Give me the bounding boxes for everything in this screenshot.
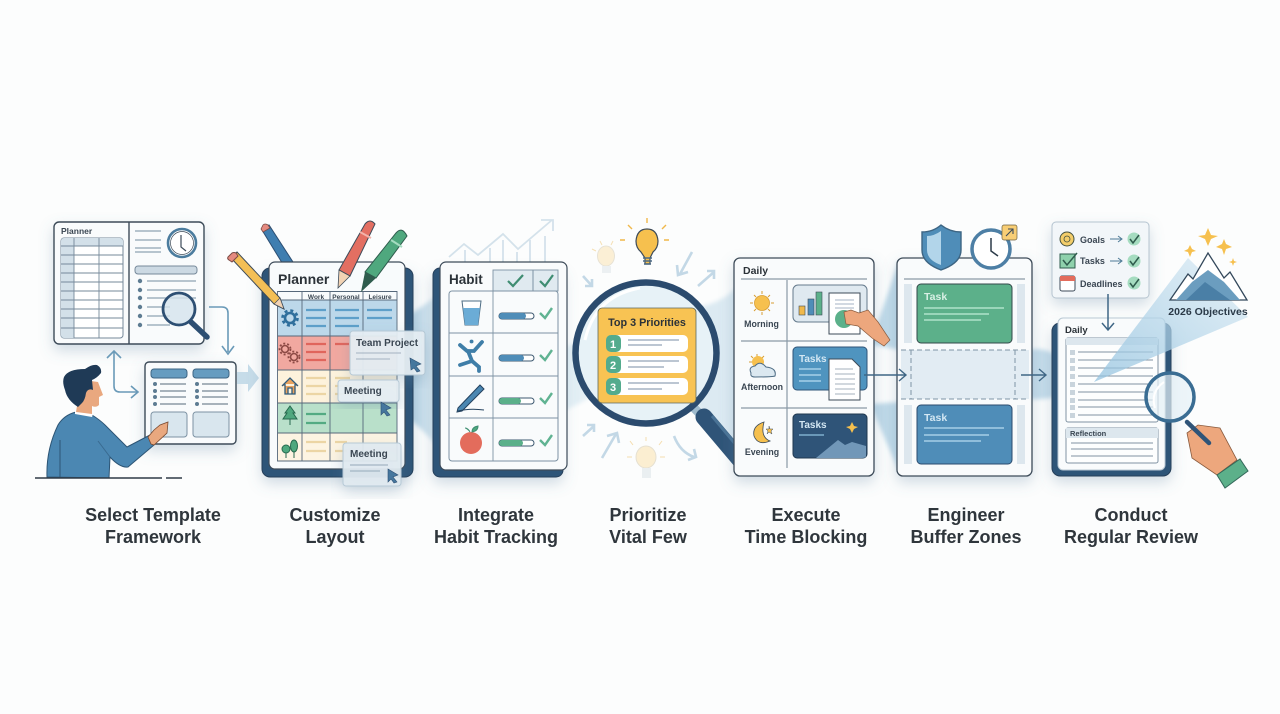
priorities note <box>598 308 696 403</box>
icon: lit bulb <box>620 218 669 264</box>
planner card <box>54 222 204 344</box>
tasks block evening: Tasks <box>799 420 827 431</box>
panel: habit tracking <box>433 220 567 477</box>
buffer zone <box>901 350 1029 399</box>
green task <box>917 284 1012 343</box>
green checks <box>540 308 552 445</box>
icon: sun <box>750 291 774 315</box>
arrow: checklist to sheet <box>1102 294 1114 330</box>
label: step 6: Engineer <box>927 505 1005 525</box>
icon: moon <box>754 422 773 443</box>
icon: trees <box>282 440 298 458</box>
icon: yellow pencil <box>228 252 284 309</box>
label: step 7: Conduct <box>1095 505 1167 525</box>
growth chart <box>449 220 553 262</box>
sticky: team project <box>350 331 425 375</box>
label: step 1: Framework <box>105 527 202 547</box>
planner card: Planner <box>278 271 330 287</box>
icon: hand <box>1187 425 1248 488</box>
checklist card: Goals <box>1080 235 1105 245</box>
heading: Daily <box>743 265 768 277</box>
priorities note: 3 <box>610 382 616 394</box>
daily sheet <box>1052 318 1171 476</box>
sticky: meeting <box>338 380 399 416</box>
planner card: Planner <box>61 226 93 236</box>
icon: clock <box>972 225 1017 268</box>
panel: customize layout <box>228 221 425 486</box>
icon: gear <box>282 310 298 326</box>
priorities note: 2 <box>610 360 616 372</box>
sticky: meeting lower <box>343 443 401 486</box>
planner card: Leisure <box>368 294 392 301</box>
buffer card <box>897 258 1032 476</box>
icon: pale bulb bottom <box>627 437 665 478</box>
layout card <box>145 362 236 444</box>
priorities note: Top 3 Priorities <box>608 317 686 329</box>
panel: buffer zones <box>864 225 1046 476</box>
icon: apple <box>460 426 482 454</box>
icon: mountain <box>1170 253 1247 300</box>
label: step 5: Execute <box>771 505 841 525</box>
icon: green pencil <box>361 230 407 292</box>
icon: tree <box>283 406 297 425</box>
icon: red pencil <box>338 221 375 288</box>
morning chart block <box>793 285 867 334</box>
habit card <box>433 262 567 477</box>
daily sheet: Reflection <box>1070 429 1107 438</box>
icon: pale bulb top <box>592 241 614 273</box>
pale arrows <box>583 252 714 460</box>
priorities note: 1 <box>610 339 616 351</box>
tasks block evening <box>793 414 867 458</box>
label: step 1: Select Template <box>85 505 221 525</box>
arrow: to buffer <box>864 369 906 381</box>
icon: gears <box>280 344 300 362</box>
label: step 2: Layout <box>305 527 365 547</box>
icon: hand <box>844 310 890 346</box>
label: step 5: Time Blocking <box>745 527 867 547</box>
panel: regular review <box>1052 222 1248 488</box>
icon: water glass <box>462 301 481 325</box>
magnifier lens <box>576 282 716 424</box>
blue task <box>917 405 1012 464</box>
planner card <box>262 262 413 477</box>
checklist card: Deadlines <box>1080 279 1123 289</box>
icon: magnifier <box>163 293 207 337</box>
light beam <box>1094 258 1248 382</box>
label: step 6: Buffer Zones <box>910 527 1022 547</box>
label: step 4: Prioritize <box>609 505 687 525</box>
label: step 3: Integrate <box>458 505 534 525</box>
sticky: meeting: Meeting <box>344 386 382 397</box>
icon: house <box>282 378 298 394</box>
time label: Afternoon <box>741 382 783 392</box>
time label: Evening <box>745 447 779 457</box>
panel: time blocking <box>734 258 890 476</box>
icon: runner <box>460 342 482 371</box>
magnifier handle <box>692 406 742 462</box>
daily card <box>734 258 874 476</box>
icon: pen <box>457 385 484 412</box>
label: step 3: Habit Tracking <box>434 527 558 547</box>
panel: prioritize vital few <box>576 218 742 478</box>
arrow: to layout <box>209 307 234 354</box>
progress bars <box>499 313 534 446</box>
flowing ribbons connecting the steps <box>400 258 1060 474</box>
checklist card: Tasks <box>1080 256 1105 266</box>
arrow: double headed <box>107 351 138 398</box>
label: step 4: Vital Few <box>609 527 688 547</box>
arrow: to review <box>1021 369 1046 381</box>
time label: Morning <box>744 319 779 329</box>
label: step 7: Regular Review <box>1064 527 1199 547</box>
icon: review magnifier <box>1146 373 1209 443</box>
panel: select template framework <box>35 222 259 478</box>
icon: shield <box>922 225 961 270</box>
arrow: pale to next step <box>237 364 259 392</box>
person <box>35 365 182 478</box>
blue task: Task <box>924 412 947 424</box>
sticky: team project: Team Project <box>356 338 419 349</box>
sticky: meeting lower: Meeting <box>350 449 388 460</box>
daily sheet: Daily <box>1065 325 1088 336</box>
checklist card <box>1052 222 1149 298</box>
planner card: Work <box>308 294 324 301</box>
habit card: Habit <box>449 272 483 287</box>
planner card: Personal <box>332 294 360 301</box>
label: step 2: Customize <box>289 505 381 525</box>
green task: Task <box>924 291 947 303</box>
objectives label: 2026 Objectives <box>1168 306 1248 318</box>
icon: cloud sun <box>749 354 775 377</box>
icon: sparkles <box>1184 228 1237 266</box>
step labels <box>85 505 1199 547</box>
icon: blue pencil <box>261 224 293 266</box>
tasks block afternoon: Tasks <box>799 354 827 365</box>
tasks block afternoon <box>793 347 867 400</box>
